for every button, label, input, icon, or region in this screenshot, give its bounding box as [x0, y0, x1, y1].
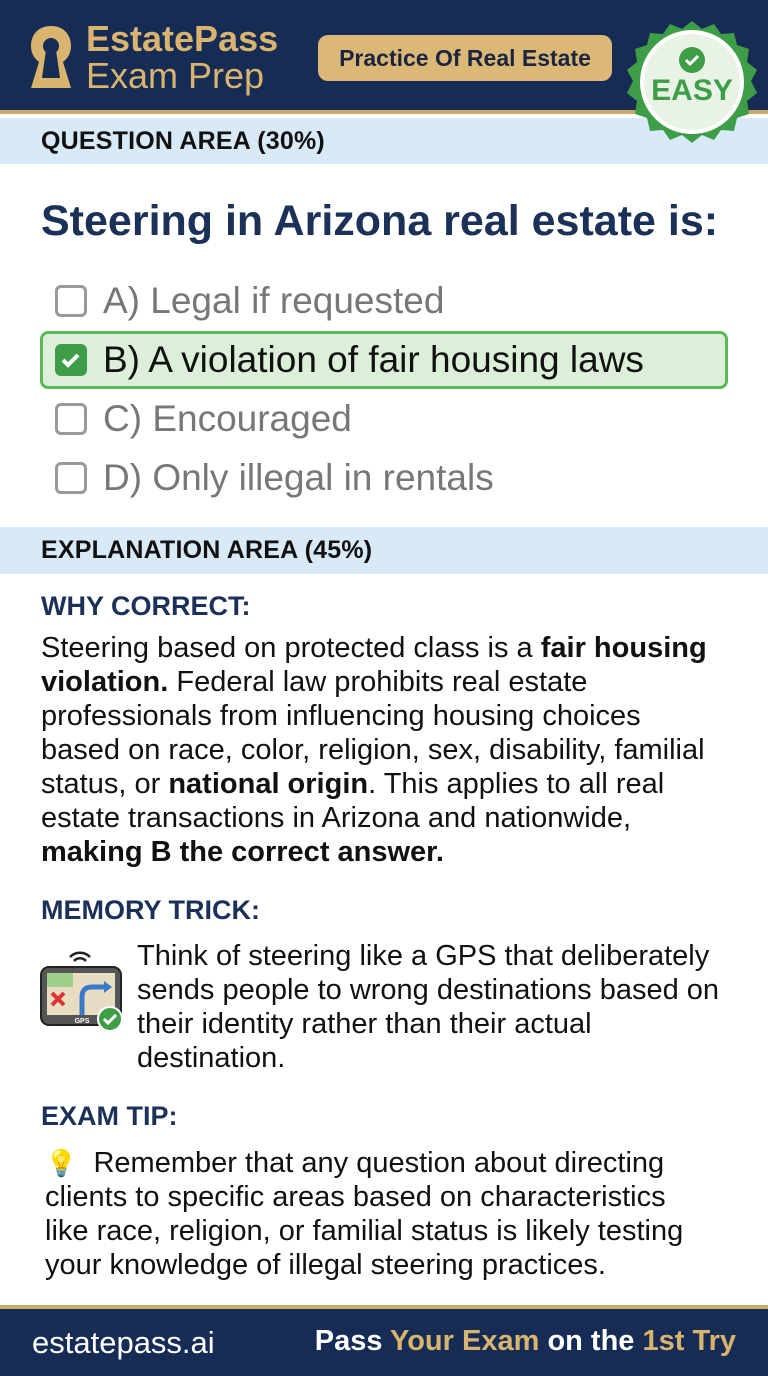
band: question area: QUESTION AREA (30%)	[41, 127, 325, 155]
text: exam tip with bulb: clients to specific areas based on characteristics	[45, 1181, 666, 1213]
icon: GPS	[40, 952, 122, 1030]
band: explanation area: EXPLANATION AREA (45%)	[41, 536, 372, 564]
text: memory trick: their identity rather than their actual	[137, 1008, 592, 1040]
text: exam tip with bulb: 💡 Remember that any question about directing	[45, 1147, 664, 1179]
heading: why correct: WHY CORRECT:	[41, 591, 251, 621]
logo text: EstatePass	[86, 18, 278, 59]
text: memory trick: Think of steering like a GPS that deliberately	[137, 940, 709, 972]
category pill	[318, 35, 612, 81]
footer url: estatepass.ai	[32, 1325, 215, 1360]
band: explanation area	[0, 527, 768, 574]
icon: keyhole logo	[31, 26, 71, 88]
text: memory trick	[137, 940, 719, 1074]
badge: easy	[627, 21, 757, 143]
option A: A) Legal if requested	[103, 280, 444, 321]
option B correct	[40, 331, 728, 389]
logo text	[86, 18, 278, 96]
text: exam tip with bulb	[45, 1147, 683, 1281]
band: question area	[0, 118, 768, 164]
question title: Steering in Arizona real estate is:	[41, 197, 718, 245]
text: memory trick: destination.	[137, 1042, 285, 1074]
badge: easy: EASY	[651, 74, 733, 107]
text: exam tip with bulb: your knowledge of illegal steering practices.	[45, 1249, 606, 1281]
text: exam tip with bulb: like race, religion, or familial status is likely testing	[45, 1215, 683, 1247]
logo text: Exam Prep	[86, 55, 264, 96]
text: why correct: Steering based on protected class is a fair housing violation. Federal law prohibits real estate professionals from influencing housing choices based on race, color, religion, sex, disability, familial status, or national origin. This applies to all real estate transactions in Arizona and nationwide, making B the correct answer.	[41, 632, 707, 868]
footer	[0, 1305, 768, 1376]
text: B) A violation of fair housing laws	[103, 339, 644, 380]
category pill: Practice Of Real Estate	[339, 45, 591, 71]
heading: exam tip: EXAM TIP:	[41, 1101, 178, 1131]
heading: memory trick: MEMORY TRICK:	[41, 895, 260, 925]
text: memory trick: sends people to wrong destinations based on	[137, 974, 719, 1006]
option D: D) Only illegal in rentals	[103, 457, 494, 498]
icon: GPS: GPS	[75, 1018, 90, 1025]
footer tagline: Pass Your Exam on the 1st Try	[315, 1325, 736, 1357]
option C: C) Encouraged	[103, 398, 352, 439]
header bar	[0, 0, 768, 114]
